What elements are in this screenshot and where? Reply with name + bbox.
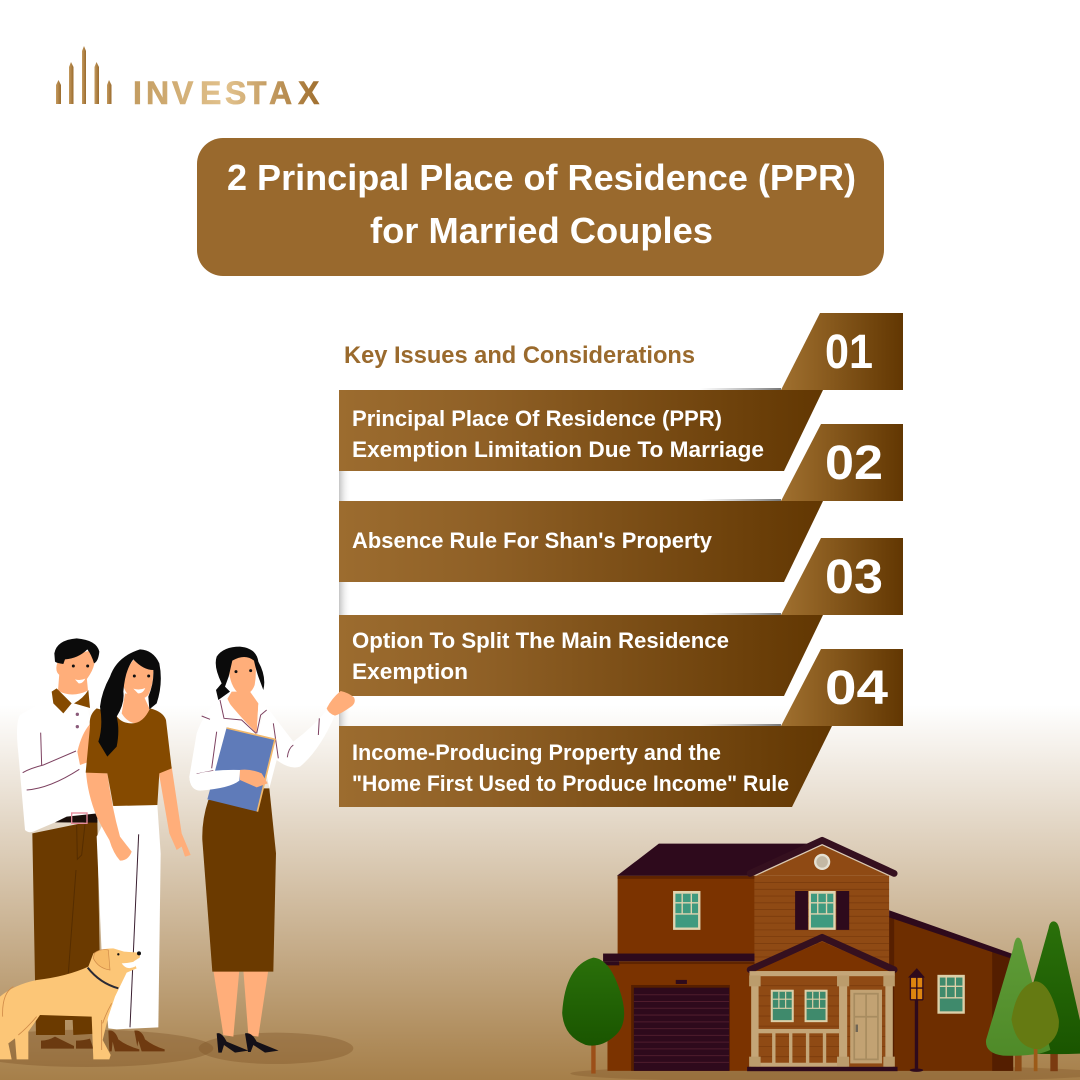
- item 4 band: [339, 726, 832, 807]
- tree: left: [562, 958, 624, 1074]
- number tab 01: 01: [825, 326, 873, 379]
- number tab 02: 02: [825, 437, 883, 490]
- number tab 03: 03: [825, 551, 883, 604]
- item 4 band: "Home First Used to Produce Income" Rule: [352, 771, 789, 796]
- item 2 band: [339, 501, 823, 582]
- figure: golden dog: [0, 948, 141, 1059]
- window: upper left: [673, 891, 700, 930]
- title banner: for Married Couples: [370, 210, 713, 251]
- title banner: 2 Principal Place of Residence (PPR): [227, 157, 856, 198]
- figure: woman with folder: [189, 647, 355, 1053]
- garage door: [631, 985, 730, 1071]
- trees: right group: [986, 921, 1080, 1071]
- item 2 band: Absence Rule For Shan's Property: [352, 528, 713, 553]
- item 3 band: Exemption: [352, 659, 468, 684]
- number tab 04: [781, 649, 903, 726]
- ground shadows: [0, 1030, 353, 1067]
- figure: woman in brown top: [86, 649, 191, 1051]
- number tab 01: [781, 313, 903, 390]
- number tab 04: 04: [825, 662, 888, 715]
- house right wing: [889, 910, 1013, 1071]
- central gabled section with siding: [750, 840, 894, 964]
- house lower floor and eave: [603, 954, 756, 1071]
- window: upper centre with shutters: [795, 891, 849, 930]
- logo icon: five bars: [56, 46, 112, 104]
- number tab 02: [781, 424, 903, 501]
- house upper floor and roof: [617, 844, 807, 955]
- logo wordmark: INVESTAX: [133, 75, 320, 111]
- item 1 band: [339, 390, 823, 471]
- porch: [747, 937, 898, 1071]
- item 3 band: [339, 615, 823, 696]
- house illustration with trees: [562, 840, 1080, 1080]
- item 4 band: Income-Producing Property and the: [352, 740, 721, 765]
- window: right wing: [937, 975, 965, 1014]
- people illustration: [0, 638, 355, 1067]
- item 1 band: Principal Place Of Residence (PPR): [352, 406, 722, 431]
- item 1 band: Exemption Limitation Due To Marriage: [352, 437, 764, 462]
- number tab 03: [781, 538, 903, 615]
- item 3 band: Option To Split The Main Residence: [352, 628, 729, 653]
- title banner: [197, 138, 884, 276]
- figure: man: [17, 638, 101, 1049]
- logo: Investax: [56, 46, 320, 111]
- heading: key issues: Key Issues and Considerations: [344, 342, 695, 369]
- ground shadow: [570, 1065, 1080, 1080]
- street lamp: [908, 968, 925, 1072]
